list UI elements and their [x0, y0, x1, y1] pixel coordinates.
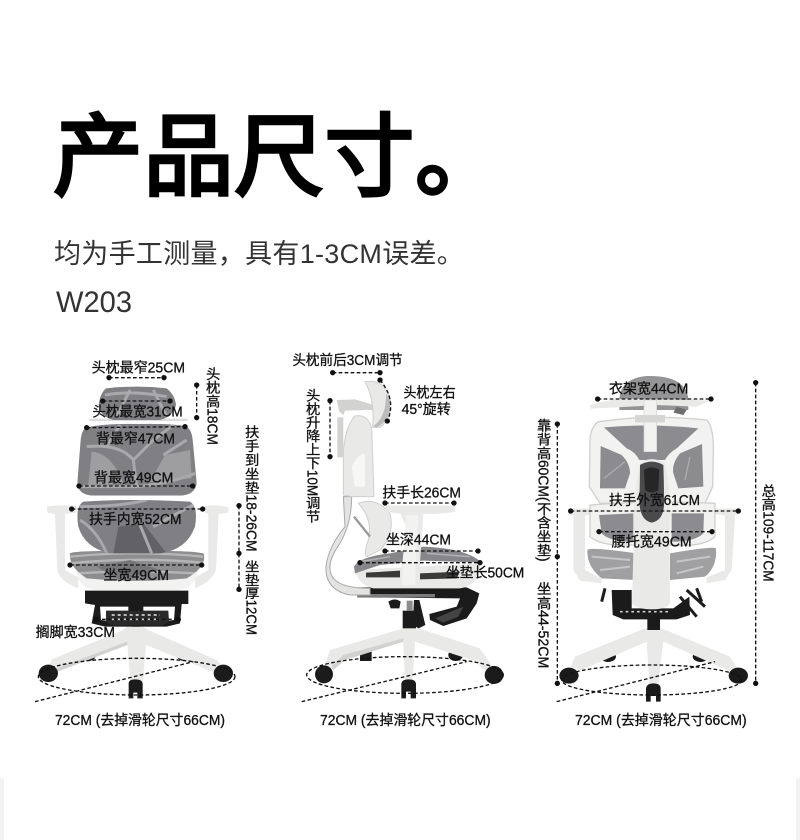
front headrest	[88, 387, 188, 421]
back labels	[535, 380, 775, 729]
front labels: 72CM (去掉滑轮尺寸66CM)	[55, 712, 225, 729]
front armrest left	[47, 505, 78, 588]
back view seat	[587, 548, 716, 580]
side labels: 坐垫长50CM	[446, 565, 524, 582]
front labels: 扶手到坐垫18-26CM	[243, 425, 259, 552]
panel: side view chair	[292, 352, 524, 729]
front base	[39, 607, 233, 698]
front labels: 扶手内宽52CM	[89, 511, 182, 528]
side labels: 扶手长26CM	[382, 484, 461, 501]
side seat	[354, 547, 482, 588]
side labels: 头枕左右	[403, 384, 456, 401]
side headrest and bracket	[337, 381, 390, 457]
back chair drawing	[559, 376, 748, 702]
front labels	[36, 358, 259, 729]
front labels: 头枕最宽31CM	[92, 404, 183, 421]
front armrest right	[195, 505, 229, 588]
model number: W203	[56, 286, 132, 319]
back view headrest and hanger	[590, 376, 710, 415]
side labels: 72CM (去掉滑轮尺寸66CM)	[320, 712, 491, 729]
back labels: 扶手外宽61CM	[609, 492, 700, 509]
back labels: 衣架宽44CM	[609, 380, 688, 397]
front seat mesh	[70, 551, 204, 581]
side base	[315, 599, 503, 698]
back labels: 总高109-117CM	[759, 484, 775, 582]
side labels: 坐深44CM	[386, 531, 451, 548]
side dimension marks	[302, 370, 503, 702]
front labels: 头枕高18CM	[204, 366, 220, 445]
front labels: 头枕最窄25CM	[92, 358, 185, 376]
back view armrests	[568, 508, 740, 583]
front lumbar mesh	[77, 500, 196, 554]
side labels: 头枕升降上下10M调节	[304, 388, 320, 524]
front labels: 背最宽49CM	[94, 469, 173, 486]
back view footrest	[602, 588, 705, 619]
side labels: 头枕前后3CM调节	[292, 352, 403, 369]
front labels: 坐宽49CM	[103, 567, 169, 584]
back labels: 腰托宽49CM	[612, 534, 692, 551]
side labels	[292, 352, 524, 729]
back view frame	[589, 417, 713, 503]
side strip: left	[0, 778, 4, 840]
side armrest	[386, 506, 456, 587]
front chair drawing	[39, 387, 233, 698]
front labels: 搁脚宽33CM	[36, 624, 115, 641]
back labels: 坐高44-52CM	[535, 581, 551, 668]
front dimension marks	[35, 375, 242, 702]
side chair drawing	[315, 381, 503, 698]
back view lumbar	[590, 502, 715, 545]
title: 产品尺寸。	[53, 108, 506, 208]
back labels: 靠背高60CM(不含坐垫)	[535, 418, 551, 562]
side spine and back frame	[326, 416, 391, 595]
back labels: 72CM (去掉滑轮尺寸66CM)	[575, 712, 747, 729]
front labels: 坐垫厚12CM	[243, 560, 259, 635]
back dimension marks	[555, 380, 758, 702]
side footrest	[357, 587, 479, 626]
front footrest	[85, 591, 188, 627]
back view spine	[632, 400, 670, 609]
panel: back view chair	[535, 376, 775, 729]
side labels: 45°旋转	[402, 401, 451, 418]
front seat shell	[75, 570, 198, 590]
front labels: 背最窄47CM	[96, 429, 175, 447]
front back mesh	[75, 423, 198, 498]
panel: front view chair	[35, 358, 259, 729]
side strip: right	[796, 778, 800, 840]
subtitle: 均为手工测量，具有1-3CM误差。	[54, 239, 464, 269]
back view base	[559, 612, 748, 702]
